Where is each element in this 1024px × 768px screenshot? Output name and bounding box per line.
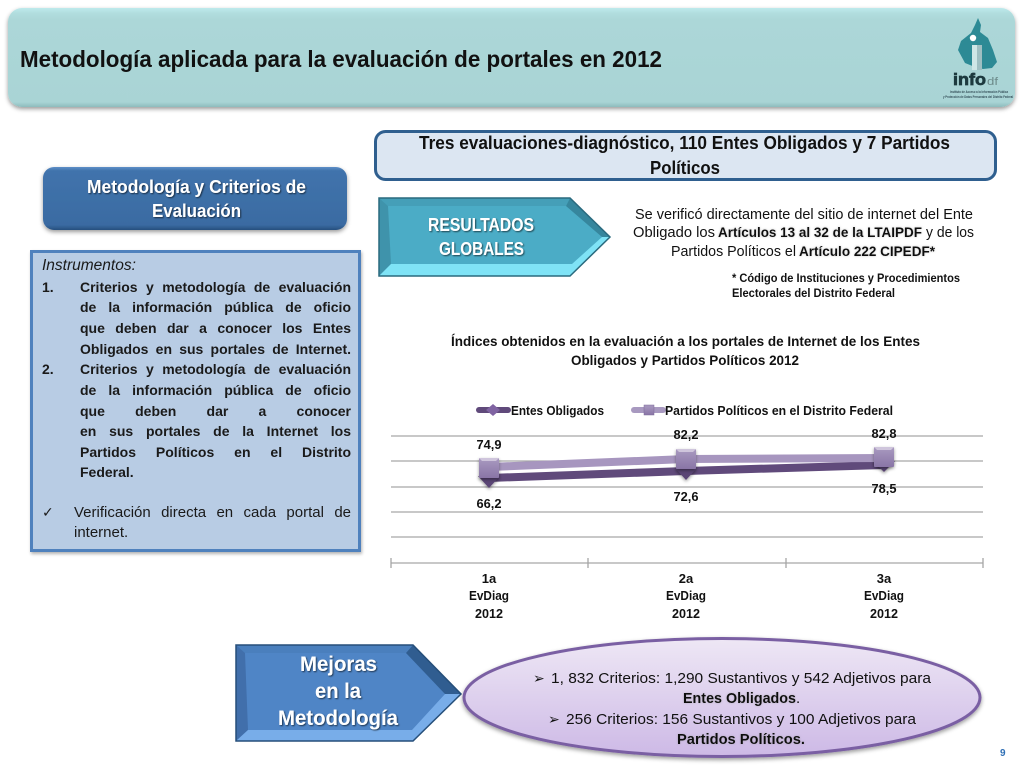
icon: infoDF logo [943,18,1013,99]
data labels: 82,8 [872,426,896,441]
category labels: EvDiag [666,588,706,603]
category labels: EvDiag [469,588,509,603]
panel: instruments: Federal. [80,464,134,480]
callout ellipse: criteria [464,638,980,756]
panel: instruments: Instrumentos: [42,257,136,274]
arrow: improvements in methodology [236,645,461,741]
heading button: methodology and criteria [43,167,347,230]
arrow: improvements in methodology: Mejoras [300,653,377,676]
summary box: three evaluations: Políticos [650,158,720,178]
chart legend: Entes Obligados [511,403,604,418]
panel: instruments: Partidos Políticos en el Distrito [80,444,351,460]
panel: instruments: 1. [42,279,54,295]
header banner [8,8,1015,107]
category labels: EvDiag [864,588,904,603]
callout ellipse: criteria: 1, 832 Criterios: 1,290 Sustantivos y 542 Adjetivos para [551,670,932,687]
line chart [391,403,983,621]
summary box: three evaluations [376,132,996,180]
panel: instruments: que deben dar a conocer los Entes [80,320,351,336]
chart title: Obligados y Partidos Políticos 2012 [571,352,799,368]
callout ellipse: criteria: Entes Obligados [683,690,796,707]
data labels: 74,9 [476,437,502,452]
title: Metodología aplicada para la evaluación de portales en 2012 [20,46,662,72]
data labels [476,426,896,511]
verification text: Artículo 222 CIPEDF* [799,243,936,259]
verification text: y de los [926,225,974,241]
panel: instruments: Verificación directa en cada portal de [74,504,351,521]
icon: infoDF logo: Instituto de Acceso a la Información Pública [950,90,1009,94]
verification text: Artículos 13 al 32 de la LTAIPDF [718,224,922,240]
footnote: Electorales del Distrito Federal [732,286,895,300]
callout ellipse: criteria: ➢ [548,712,560,728]
panel: instruments: Obligados en sus portales de Internet. [80,341,351,357]
panel: instruments: internet. [74,524,128,541]
verification text: Partidos Políticos el [671,244,796,260]
verification text [633,207,974,260]
category labels: 2012 [475,606,503,621]
arrow: improvements in methodology: en la [315,680,361,703]
category labels [469,571,904,621]
page number: 9 [1000,748,1006,759]
verification text: Obligado los [633,225,715,241]
panel: instruments: que deben dar a conocer [80,403,351,419]
arrow: global results: RESULTADOS [428,214,534,235]
panel: instruments: de la información pública de oficio [80,382,351,398]
panel: instruments: de la información pública de oficio [80,299,351,315]
category labels: 2a [679,571,694,586]
data labels: 78,5 [872,481,896,496]
arrow: global results: GLOBALES [439,238,524,259]
data labels: 72,6 [674,489,698,504]
panel: instruments: Criterios y metodología de evaluación [80,361,351,377]
footnote [732,271,960,300]
series: Partidos Políticos [479,447,894,478]
category labels: 3a [877,571,892,586]
heading button: methodology and criteria: Evaluación [152,201,241,221]
heading button: methodology and criteria: Metodología y Criterios de [87,177,306,197]
verification text: Se verificó directamente del sitio de internet del Ente [635,207,973,223]
data labels: 82,2 [674,427,698,442]
icon: infoDF logo: info [953,70,986,89]
arrow: improvements in methodology: Metodología [278,707,398,730]
chart title: Índices obtenidos en la evaluación a los portales de Internet de los Entes [451,333,920,349]
icon: infoDF logo: df [987,76,999,88]
callout ellipse: criteria: . [796,690,800,707]
panel: instruments: ✓ [42,505,54,521]
panel: instruments: Criterios y metodología de evaluación [80,279,351,295]
summary box: three evaluations: Tres evaluaciones-diagnóstico, 110 Entes Obligados y 7 Partidos [419,133,950,153]
callout ellipse: criteria: Partidos Políticos. [677,731,805,748]
category labels: 2012 [672,606,700,621]
data labels: 66,2 [476,496,502,511]
category labels: 2012 [870,606,898,621]
footnote: * Código de Instituciones y Procedimientos [732,271,960,285]
chart title [451,333,920,368]
series: Entes Obligados [478,461,895,488]
panel: instruments: 2. [42,361,54,377]
callout ellipse: criteria: ➢ [533,671,545,687]
callout ellipse: criteria: 256 Criterios: 156 Sustantivos y 100 Adjetivos para [566,711,917,728]
chart legend: Partidos Políticos en el Distrito Federal [665,403,893,418]
category labels: 1a [482,571,497,586]
arrow: global results [379,198,610,276]
chart legend [479,403,893,418]
panel: instruments: en sus portales de la Internet los [80,423,351,439]
panel: instruments [30,250,361,552]
